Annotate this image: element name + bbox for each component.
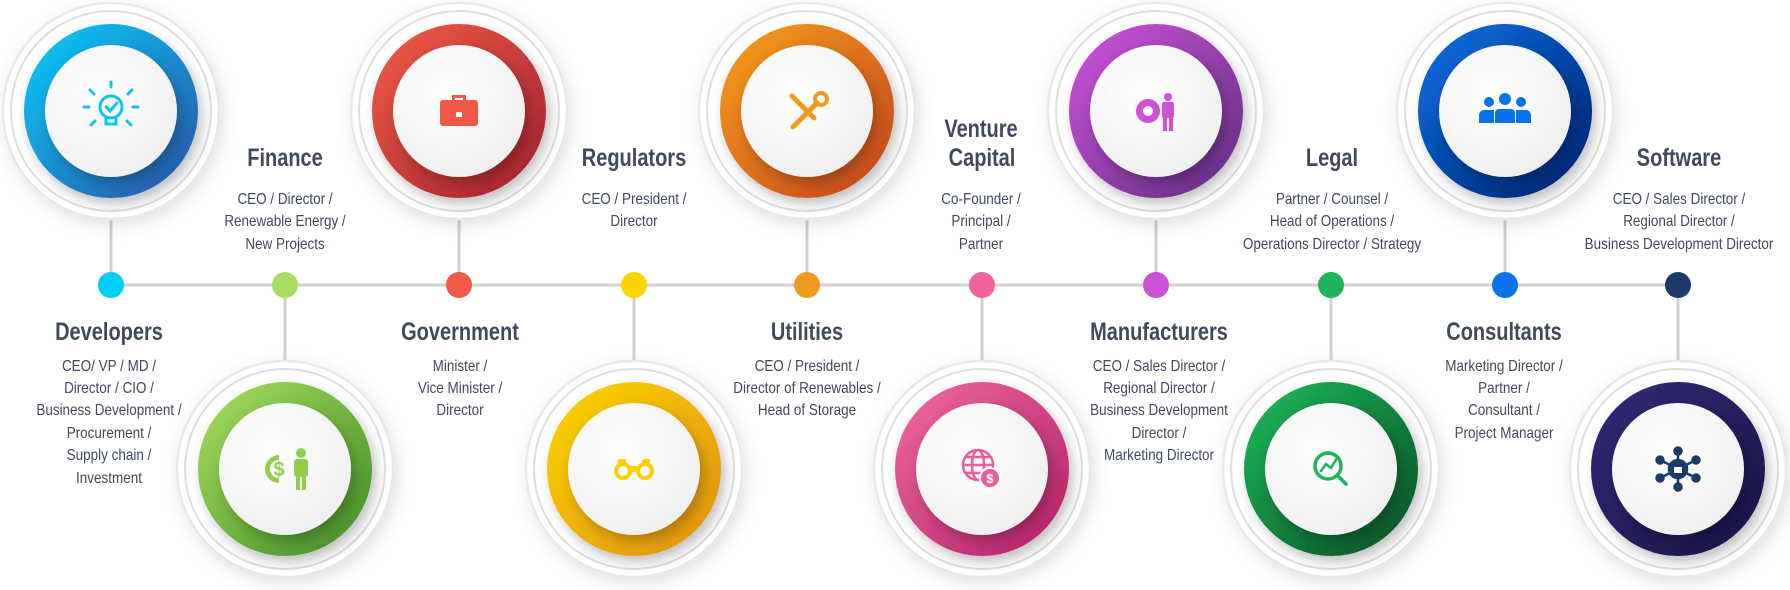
icon: globe dollar xyxy=(963,450,993,480)
label: utilities: CEO / President / xyxy=(755,358,860,375)
icon: briefcase xyxy=(440,95,478,126)
label: finance: Renewable Energy / xyxy=(224,213,347,230)
label: software: Regional Director / xyxy=(1623,213,1736,230)
label: government: Government xyxy=(401,318,519,346)
label: manufacturers: Manufacturers xyxy=(1090,318,1228,346)
circle: finance xyxy=(177,361,393,577)
label: government: Vice Minister / xyxy=(418,380,503,397)
label: venture capital: Co-Founder / xyxy=(941,191,1022,208)
label: legal: Legal xyxy=(1306,144,1358,172)
label: manufacturers xyxy=(1090,318,1228,464)
label: venture capital: Capital xyxy=(949,144,1015,172)
label: venture capital xyxy=(941,115,1022,253)
label: software: CEO / Sales Director / xyxy=(1613,191,1746,208)
label: developers: Business Development / xyxy=(36,402,183,419)
circle: venture capital: $ xyxy=(986,471,994,486)
icon: team xyxy=(1479,93,1531,123)
label: government: Minister / xyxy=(433,358,488,375)
label: government xyxy=(401,318,519,419)
label: manufacturers: Marketing Director xyxy=(1104,447,1214,464)
icon: binoculars xyxy=(614,459,654,480)
label: venture capital: Partner xyxy=(959,236,1003,253)
label: venture capital: Principal / xyxy=(951,213,1011,230)
label: utilities: Director of Renewables / xyxy=(733,380,882,397)
icon: tools xyxy=(792,93,827,127)
circle: software xyxy=(1570,361,1786,577)
icon: money person xyxy=(265,448,308,490)
circle: consultants xyxy=(1397,3,1613,219)
label: venture capital: Venture xyxy=(944,115,1018,143)
label: legal: Head of Operations / xyxy=(1270,213,1395,230)
icon: gear person xyxy=(1136,93,1174,131)
label: software: Business Development Director xyxy=(1585,236,1774,253)
icon: lightbulb xyxy=(84,82,138,125)
label: consultants: Consultant / xyxy=(1468,402,1541,419)
label: developers: Supply chain / xyxy=(67,447,152,464)
label: government: Director xyxy=(436,402,484,419)
label: regulators: Director xyxy=(610,213,658,230)
circle: legal xyxy=(1223,361,1439,577)
label: developers: Investment xyxy=(76,470,142,487)
circle: developers xyxy=(3,3,219,219)
label: developers: CEO/ VP / MD / xyxy=(62,358,157,375)
circle: manufacturers xyxy=(1048,3,1264,219)
label: legal: Partner / Counsel / xyxy=(1276,191,1389,208)
circle: utilities xyxy=(699,3,915,219)
circle: venture capital xyxy=(874,361,1090,577)
label: consultants: Partner / xyxy=(1478,380,1531,397)
icon: money person: $ xyxy=(273,459,285,481)
label: utilities xyxy=(733,318,882,419)
label: regulators: Regulators xyxy=(582,144,686,172)
label: finance: Finance xyxy=(247,144,323,172)
icon: network xyxy=(1656,448,1700,490)
icon: magnifier chart xyxy=(1315,453,1346,484)
label: consultants: Consultants xyxy=(1446,318,1562,346)
label: finance: New Projects xyxy=(245,236,325,253)
label: utilities: Utilities xyxy=(771,318,843,346)
label: software: Software xyxy=(1637,144,1721,172)
label: manufacturers: Business Development xyxy=(1090,402,1228,419)
label: regulators: CEO / President / xyxy=(582,191,687,208)
label: developers: Developers xyxy=(55,318,163,346)
label: developers: Director / CIO / xyxy=(64,380,155,397)
label: manufacturers: Regional Director / xyxy=(1103,380,1216,397)
circle: government xyxy=(351,3,567,219)
label: software xyxy=(1585,144,1774,253)
circle: regulators xyxy=(526,361,742,577)
label: regulators xyxy=(582,144,687,230)
label: legal: Operations Director / Strategy xyxy=(1243,236,1422,253)
label: finance: CEO / Director / xyxy=(237,191,333,208)
label: legal xyxy=(1243,144,1422,253)
label: manufacturers: Director / xyxy=(1132,425,1187,442)
label: finance xyxy=(224,144,347,253)
timeline dots xyxy=(98,272,1691,298)
label: developers: Procurement / xyxy=(67,425,152,442)
label: manufacturers: CEO / Sales Director / xyxy=(1093,358,1226,375)
label: consultants: Marketing Director / xyxy=(1445,358,1564,375)
label: consultants xyxy=(1445,318,1564,442)
timeline line xyxy=(111,205,1678,370)
label: developers xyxy=(36,318,183,487)
label: utilities: Head of Storage xyxy=(758,402,856,419)
label: consultants: Project Manager xyxy=(1455,425,1554,442)
